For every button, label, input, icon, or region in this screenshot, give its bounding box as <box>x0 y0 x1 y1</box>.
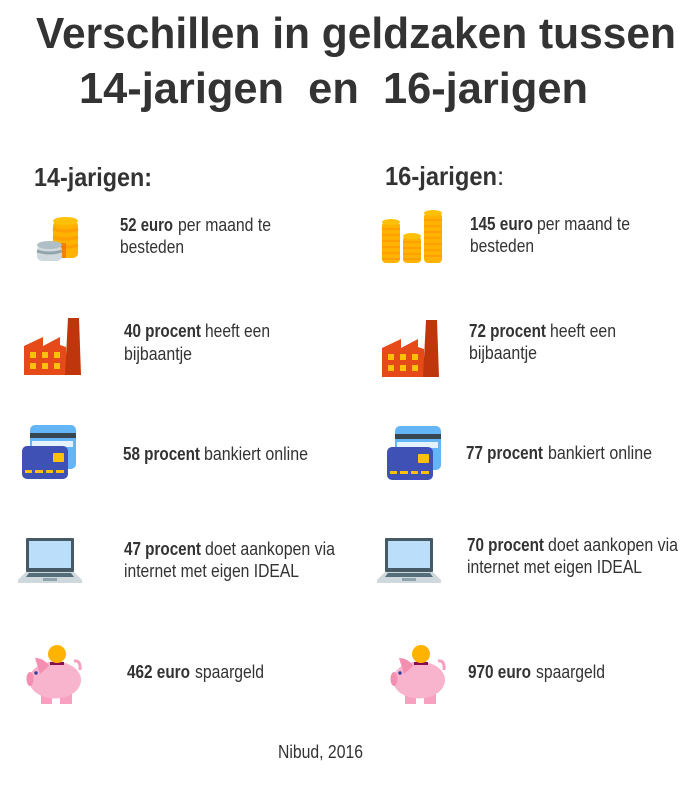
heading: 14-jarigen: 14-jarigen: <box>34 162 152 192</box>
icon: piggy bank (right) <box>390 645 445 704</box>
title: Verschillen in geldzaken tussen <box>36 9 676 58</box>
text: 14-year-olds side job: heeft een <box>205 321 270 341</box>
text: 16-year-olds monthly budget: per maand te <box>537 214 630 234</box>
icon: three coin stacks <box>382 210 442 263</box>
heading: 16-jarigen: 16-jarigen <box>385 161 497 191</box>
text: 14-year-olds monthly budget: per maand te <box>178 215 271 235</box>
text: 16-year-olds online banking <box>466 443 652 463</box>
icon: gold and silver coins <box>37 217 78 261</box>
text: 14-year-olds monthly budget: 52 euro <box>120 215 173 235</box>
text: 16-year-olds side job: bijbaantje <box>469 343 537 363</box>
text: 16-year-olds monthly budget <box>470 214 630 256</box>
text: 14-year-olds online purchases <box>124 539 336 581</box>
text: 14-year-olds savings <box>127 662 264 682</box>
text: 14-year-olds online banking <box>123 444 308 464</box>
icon: bank cards (right) <box>387 426 441 480</box>
text: 14-year-olds side job <box>124 321 270 364</box>
text: 16-year-olds savings: 970 euro <box>468 662 531 682</box>
text: 16-year-olds online banking: bankiert online <box>548 443 652 463</box>
text: 14-year-olds online purchases: doet aankopen via <box>205 539 336 559</box>
text: 14-year-olds side job: bijbaantje <box>124 344 192 364</box>
text: 14-year-olds monthly budget <box>120 215 271 257</box>
text: 16-year-olds side job: 72 procent <box>469 321 546 341</box>
text: 16-year-olds savings <box>468 662 605 682</box>
text: 14-year-olds savings: spaargeld <box>195 662 264 682</box>
text: 16-year-olds online purchases: 70 procent <box>467 535 544 555</box>
text: 14-year-olds online purchases: internet met eigen IDEAL <box>124 561 299 581</box>
icon: laptop (right) <box>377 538 441 583</box>
text: 14-year-olds savings: 462 euro <box>127 662 190 682</box>
title <box>36 9 676 113</box>
icon: bank cards <box>22 425 76 479</box>
source note: Nibud, 2016 <box>278 742 363 762</box>
icon: piggy bank <box>26 645 81 704</box>
text: 16-year-olds monthly budget: 145 euro <box>470 214 533 234</box>
title: 14-jarigen en 16-jarigen <box>79 64 588 113</box>
icon: laptop <box>18 538 82 583</box>
text: 16-year-olds side job <box>469 321 616 363</box>
text: 14-year-olds online purchases: 47 procent <box>124 539 201 559</box>
text: 14-year-olds online banking: bankiert online <box>204 444 308 464</box>
text: 14-year-olds side job: 40 procent <box>124 321 201 341</box>
text: 14-year-olds monthly budget: besteden <box>120 237 184 257</box>
text: 16-year-olds savings: spaargeld <box>536 662 605 682</box>
icon: factory (right) <box>382 320 439 377</box>
text: 16-year-olds online purchases: doet aankopen via <box>548 535 679 555</box>
text: 16-year-olds online purchases: internet met eigen IDEAL <box>467 557 642 577</box>
icon: factory <box>24 318 81 375</box>
text: 16-year-olds side job: heeft een <box>550 321 616 341</box>
text: 16-year-olds online purchases <box>467 535 679 577</box>
text: 16-year-olds monthly budget: besteden <box>470 236 534 256</box>
heading: 16-jarigen: : <box>497 161 504 191</box>
text: 14-year-olds online banking: 58 procent <box>123 444 200 464</box>
text: 16-year-olds online banking: 77 procent <box>466 443 543 463</box>
